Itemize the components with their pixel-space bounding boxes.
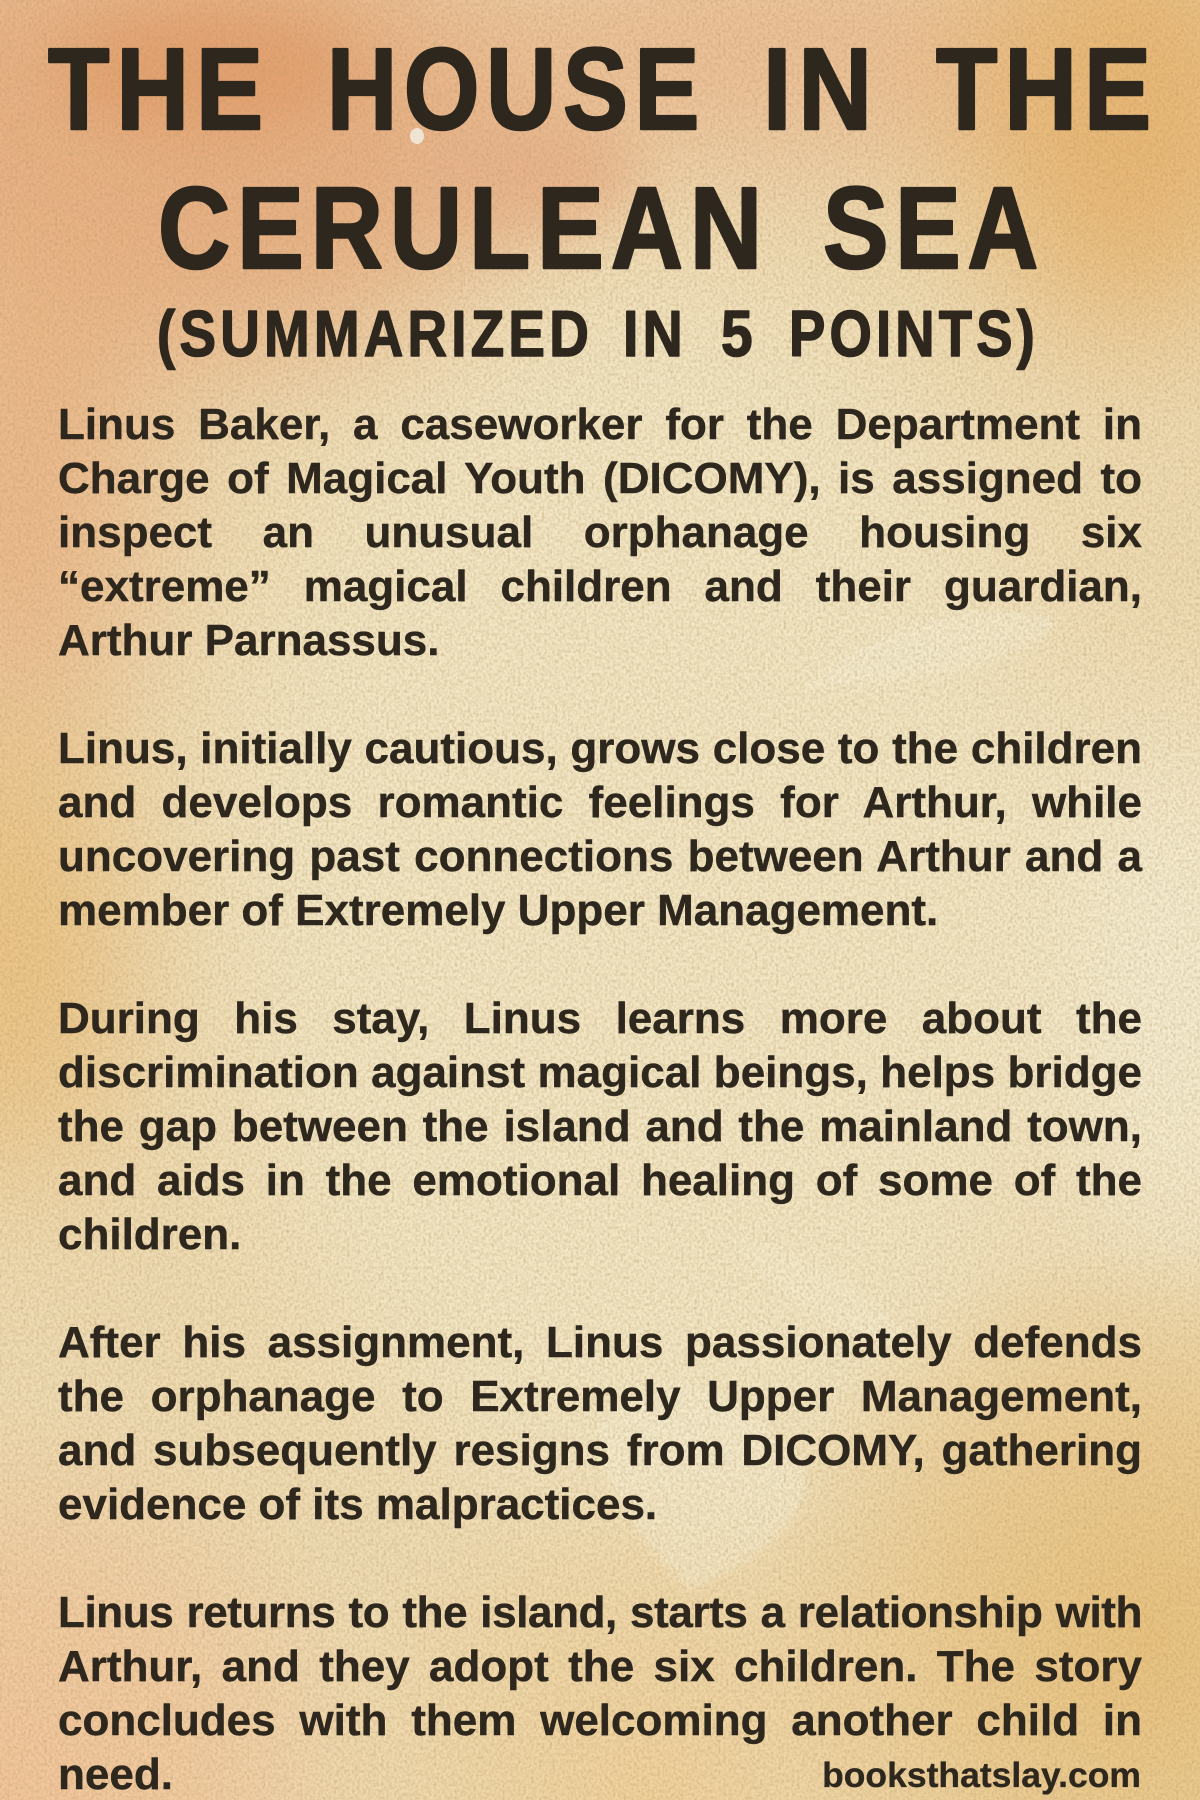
paragraph 1 — [58, 400, 1142, 665]
paragraph 3: discrimination against magical beings, helps bridge — [58, 1048, 1142, 1097]
paragraph 5: Linus returns to the island, starts a relationship with — [58, 1588, 1142, 1637]
subtitle: POINTS) — [789, 297, 1039, 370]
website credit: booksthatslay.com — [822, 1755, 1141, 1795]
title line 2: CERULEAN — [158, 163, 769, 293]
paragraph 4: and subsequently resigns from DICOMY, gathering — [58, 1426, 1142, 1475]
paragraph 5 — [58, 1588, 1142, 1799]
paragraph 2: and develops romantic feelings for Arthur, while — [58, 778, 1142, 827]
title line 1: HOUSE — [327, 24, 706, 154]
paragraph 1: “extreme” magical children and their guardian, — [58, 562, 1142, 611]
heading block — [48, 24, 1158, 370]
paragraph 4 — [58, 1318, 1142, 1529]
title line 1: THE — [48, 24, 270, 154]
paragraph 3: and aids in the emotional healing of some of the — [58, 1156, 1142, 1205]
paragraph 1: inspect an unusual orphanage housing six — [58, 508, 1142, 557]
paragraph 4: evidence of its malpractices. — [58, 1480, 657, 1529]
paragraph 3: children. — [58, 1210, 241, 1259]
title line 2: SEA — [823, 163, 1045, 293]
subtitle — [157, 297, 1039, 370]
paragraph 2: Linus, initially cautious, grows close to the children — [58, 724, 1142, 773]
subtitle: 5 — [721, 297, 757, 370]
paragraph 5: need. — [58, 1750, 173, 1799]
paragraph 1: Arthur Parnassus. — [58, 616, 439, 665]
subtitle: IN — [623, 297, 687, 370]
title line 1: IN — [763, 24, 879, 154]
paragraph 4: After his assignment, Linus passionately defends — [58, 1318, 1142, 1367]
paragraph 5: concludes with them welcoming another child in — [58, 1696, 1142, 1745]
subtitle: (SUMMARIZED — [157, 297, 593, 370]
paragraph 2: member of Extremely Upper Management. — [58, 886, 938, 935]
paragraph 1: Charge of Magical Youth (DICOMY), is assigned to — [58, 454, 1142, 503]
paragraph 4: the orphanage to Extremely Upper Management, — [58, 1372, 1142, 1421]
paragraph 2 — [58, 724, 1142, 935]
paragraph 3 — [58, 994, 1142, 1259]
paragraph 2: uncovering past connections between Arthur and a — [58, 832, 1142, 881]
paper speck — [410, 128, 424, 144]
paragraph 5: Arthur, and they adopt the six children. The story — [58, 1642, 1142, 1691]
paragraph 3: the gap between the island and the mainland town, — [58, 1102, 1142, 1151]
paragraph 3: During his stay, Linus learns more about the — [58, 994, 1142, 1043]
title line 1: THE — [936, 24, 1158, 154]
title line 1 — [48, 24, 1158, 154]
paragraph 1: Linus Baker, a caseworker for the Department in — [58, 400, 1142, 449]
